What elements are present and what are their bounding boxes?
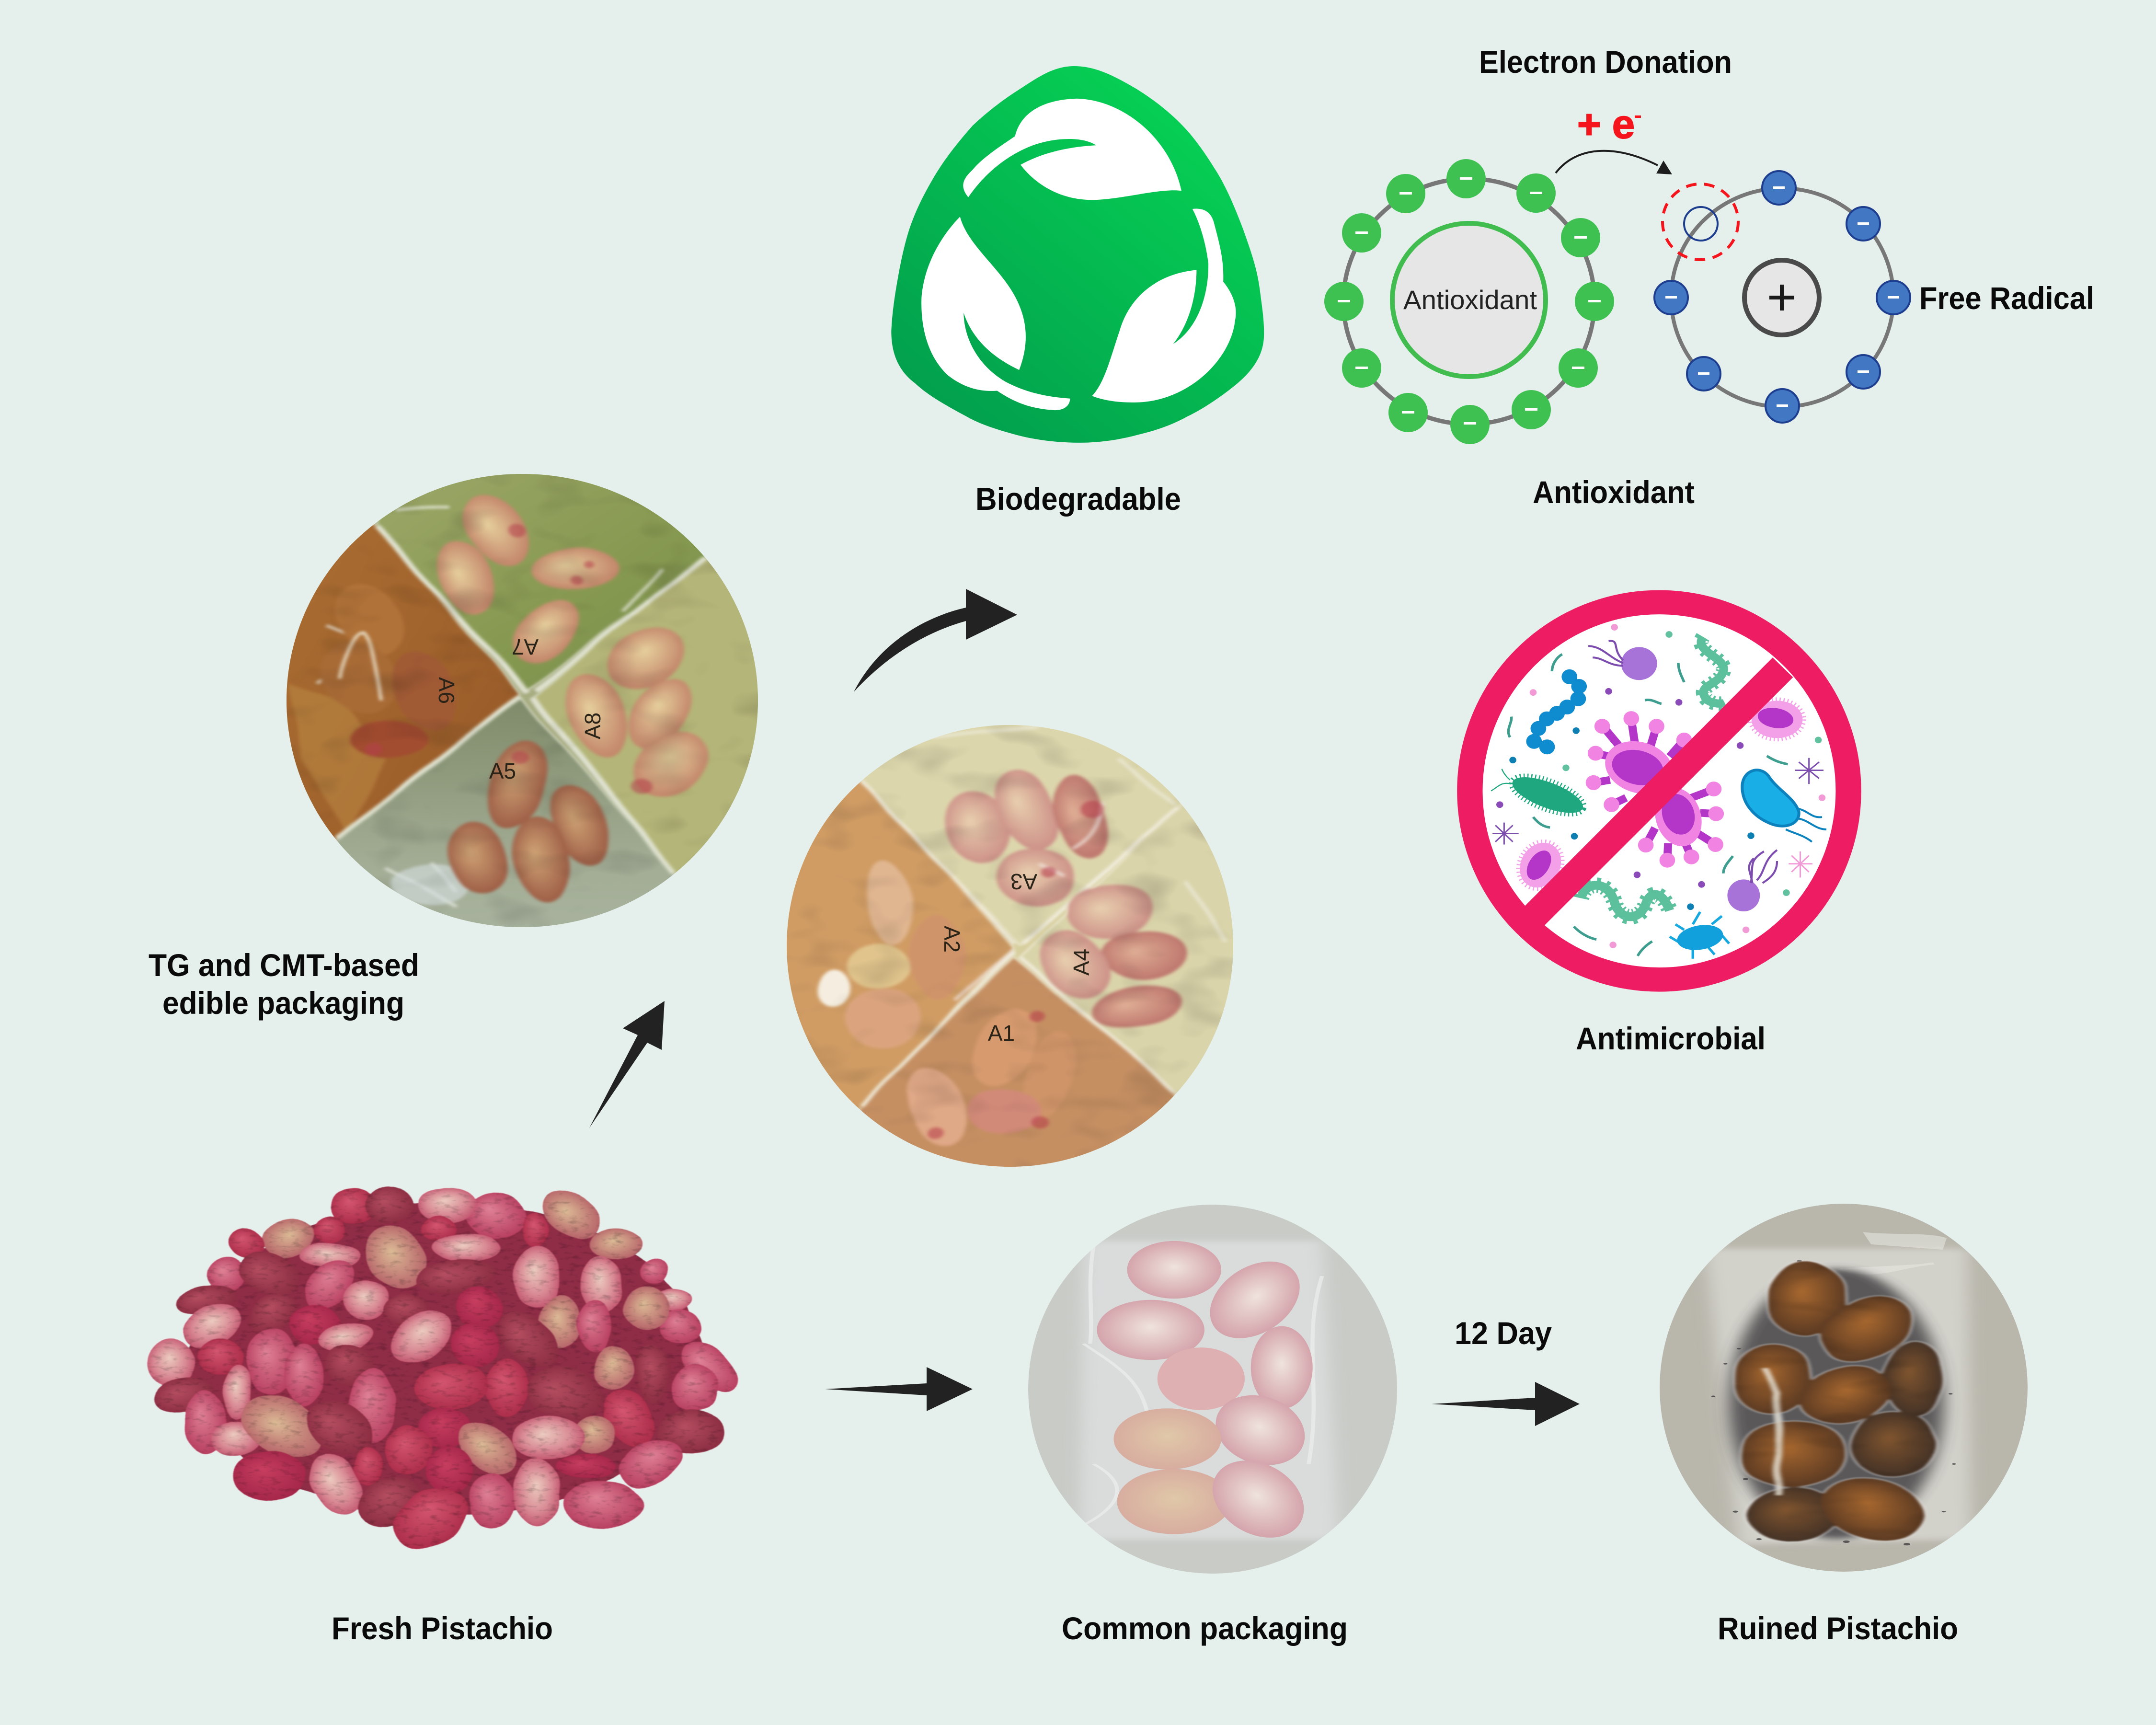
segment A3: [861, 725, 1181, 946]
segment A1: [777, 957, 1226, 1213]
arrow: curved to properties: [854, 589, 1017, 692]
antioxidant nucleus: [1392, 223, 1546, 377]
heading: TG and CMT-based edible packaging: [149, 947, 419, 1021]
heading: Common packaging: Common packaging: [1062, 1610, 1348, 1646]
labels on photo A5 to A8: [434, 634, 605, 783]
red dashed highlight: [1663, 184, 1738, 260]
photo: fresh pistachio heap: [143, 1184, 751, 1556]
heading: Free Radical: Free Radical: [1919, 280, 2094, 316]
electrons: green: [1324, 159, 1614, 444]
blue chain bacteria: [1526, 669, 1587, 754]
segment A5: [335, 698, 674, 927]
segment A7: [376, 474, 706, 690]
pink cell left: [1512, 836, 1569, 894]
labels on photo A1 to A4: A2: [940, 926, 964, 953]
heading: Fresh Pistachio: Fresh Pistachio: [332, 1610, 553, 1646]
labels on photo A1 to A4: A4: [1069, 949, 1094, 976]
prohibition ring and bar: [1470, 602, 1848, 979]
missing electron: [1684, 207, 1718, 241]
photo: ruined pistachio: [1660, 1204, 2028, 1572]
green spiral bacteria lower: [1581, 885, 1670, 917]
photo: packaged pistachios A1 to A4: [787, 725, 1233, 1167]
small dots and rods: [1492, 624, 1825, 956]
icon: no microbes sign: [1470, 602, 1848, 979]
labels on photo A5 to A8: A8: [580, 713, 605, 739]
text: Antioxidant: Antioxidant: [1403, 285, 1537, 315]
segment A2: [712, 692, 1014, 1213]
blue bacterium: [1742, 770, 1826, 842]
mold: [1729, 1268, 1944, 1539]
labels on photo A1 to A4: A1: [988, 1021, 1015, 1046]
segment A4: [1020, 805, 1233, 1094]
heading: Ruined Pistachio: Ruined Pistachio: [1718, 1610, 1958, 1646]
electrons: blue: [1654, 171, 1910, 423]
labels on photo A5 to A8: A5: [489, 759, 516, 783]
segment A8: [533, 557, 758, 874]
arrow: common packaging to ruined: [1432, 1382, 1580, 1426]
pink cell right: [1752, 701, 1802, 738]
labels on photo A1 to A4: A3: [1010, 869, 1037, 894]
labels on photo A1 to A4: [940, 869, 1094, 1046]
free radical nucleus: [1744, 260, 1819, 335]
photo: packaged pistachios A5 to A8: [287, 474, 758, 927]
purple flagellate: [1588, 641, 1657, 680]
diagram: free radical atom: [1654, 171, 1910, 423]
blue spiky microbe: [1670, 912, 1729, 959]
text: 12 Day: 12 Day: [1455, 1315, 1552, 1351]
diagram: antioxidant atom: [1324, 159, 1614, 444]
label: plus electron: + e: [1577, 102, 1635, 147]
heading: Biodegradable: Biodegradable: [975, 481, 1181, 517]
arrow: up to edible packaging: [589, 1001, 665, 1128]
photo: common packaging: [1028, 1205, 1397, 1574]
heading: TG and CMT-based edible packaging: TG and CMT-based: [149, 947, 419, 983]
labels on photo A5 to A8: A6: [434, 677, 459, 704]
icon: biodegradable leaf recycling logo: [891, 66, 1264, 443]
heading: Antimicrobial: Antimicrobial: [1576, 1021, 1766, 1056]
virus: [1586, 711, 1724, 868]
segment A6: [287, 524, 521, 841]
heading: Antioxidant: Antioxidant: [1533, 474, 1695, 510]
arrow: fresh to common packaging: [825, 1367, 973, 1411]
heading: TG and CMT-based edible packaging: edible packaging: [162, 985, 404, 1021]
arrow: electron transfer: [1556, 151, 1672, 174]
labels on photo A5 to A8: A7: [512, 634, 539, 659]
heading: Electron Donation: Electron Donation: [1479, 44, 1732, 80]
purple flagellate lower: [1727, 850, 1777, 911]
green bacillus: [1491, 769, 1588, 821]
green spiral bacteria upper: [1701, 637, 1725, 703]
